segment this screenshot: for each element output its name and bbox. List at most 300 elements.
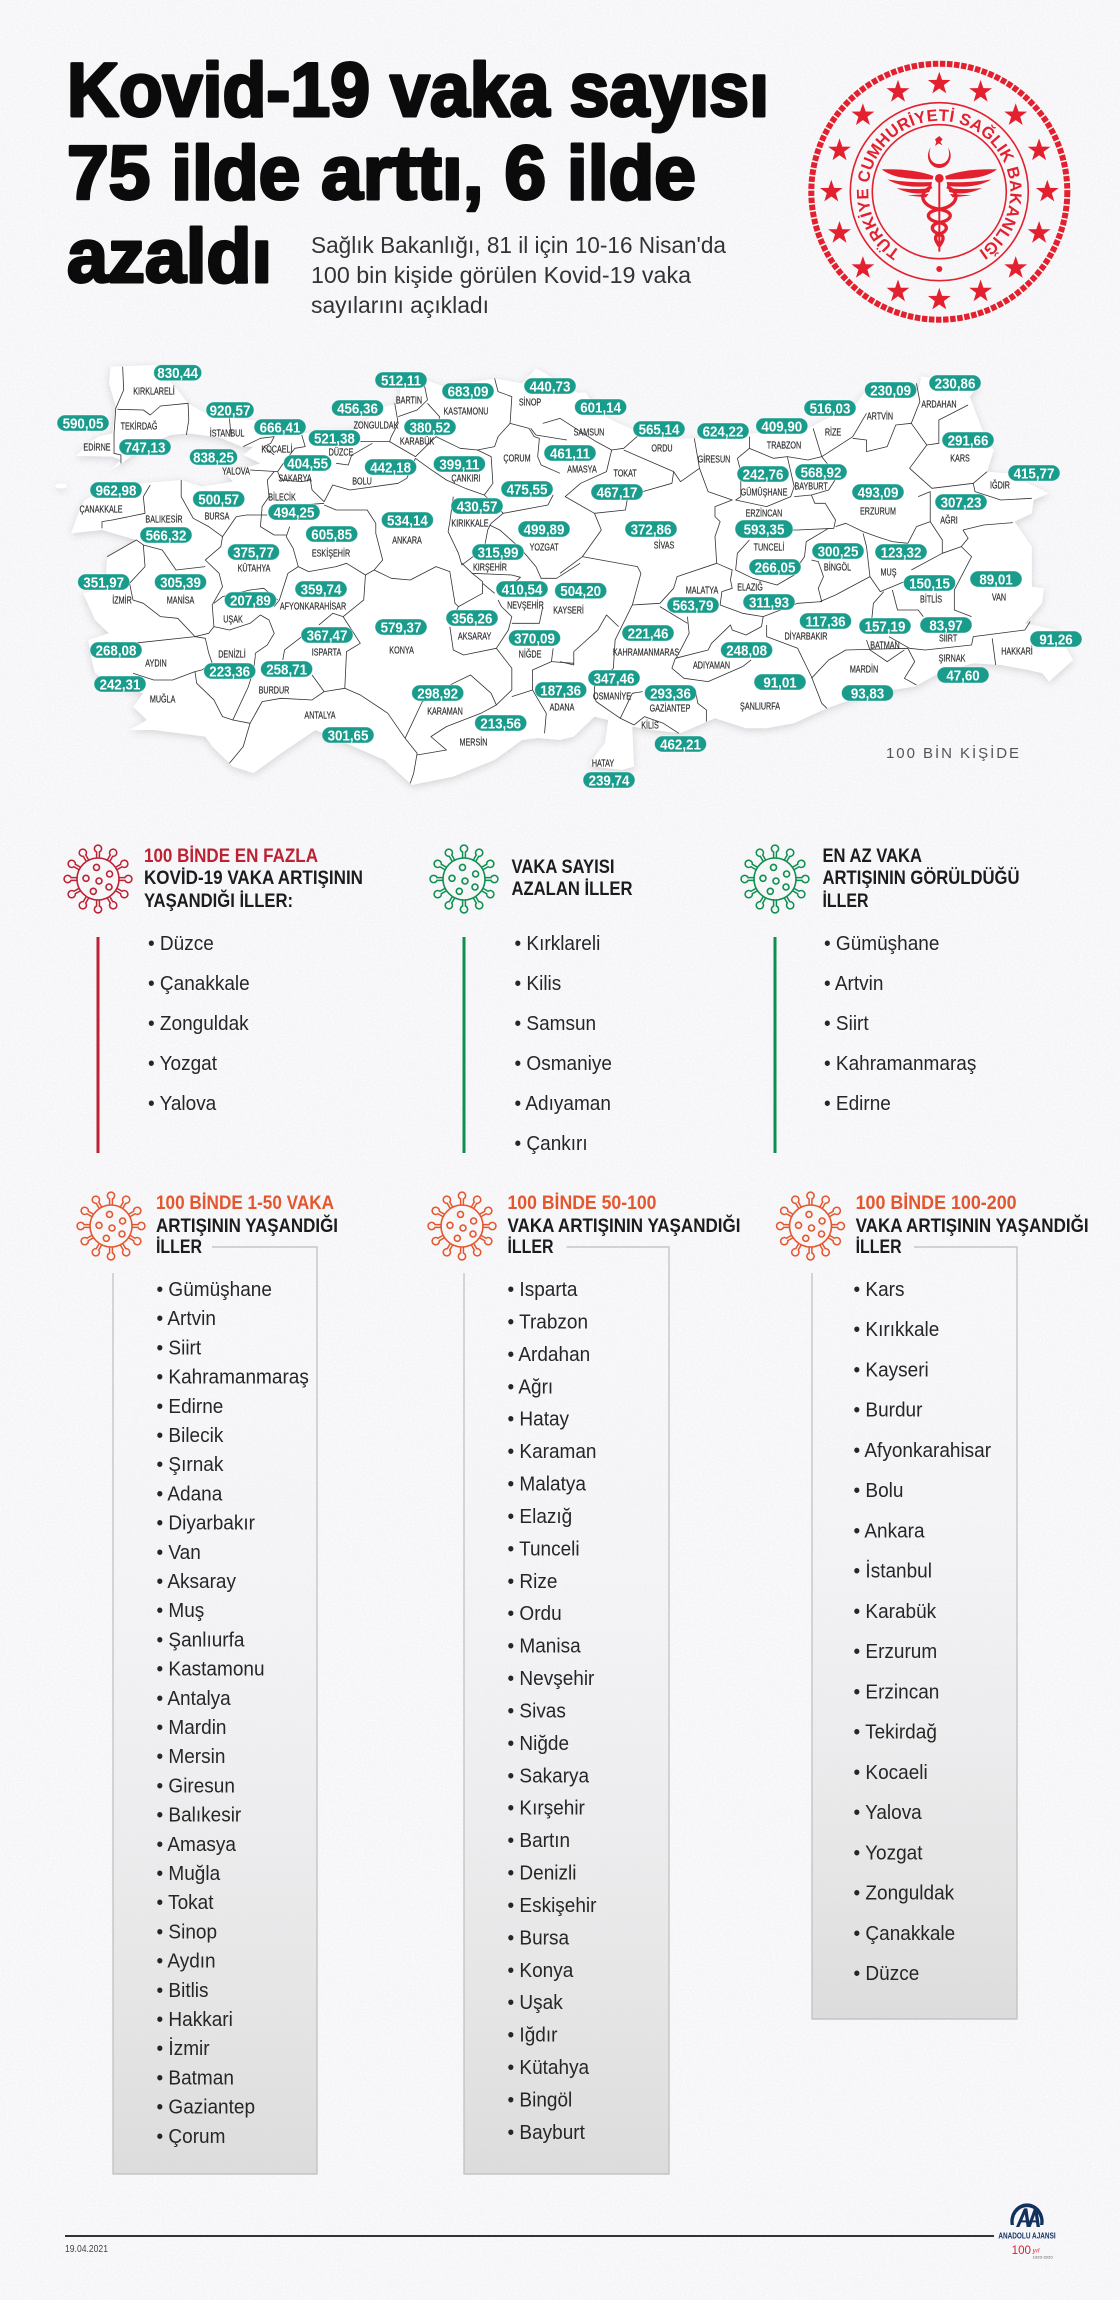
badge 311,93: 311,93 [749,595,789,612]
badge 89,01 [970,571,1022,589]
list: 100-200 provinces: • Kars [854,1279,905,1301]
subtitle text block: 100 bin kişide görülen Kovid-19 vaka [311,262,691,288]
list: 50-100 provinces: • Bursa [508,1927,569,1950]
heading: decreasing provinces: VAKA SAYISI [512,857,614,878]
badge 47,60: 47,60 [946,668,980,685]
badge 213,56: 213,56 [480,716,521,733]
badge 462,21: 462,21 [660,737,701,754]
province name labels: KIRKLARELİ [133,385,175,397]
province name labels [79,385,1033,769]
badge 307,23: 307,23 [941,495,982,512]
badge 430,57: 430,57 [457,499,498,516]
list: 100-200 provinces: • Düzce [854,1963,919,1985]
badge 601,14: 601,14 [580,400,621,417]
badge 409,90: 409,90 [761,419,802,436]
panel: 1-50 per 100k [77,1192,338,2174]
badge 356,26: 356,26 [452,611,493,628]
badge 221,46: 221,46 [628,626,669,643]
province name labels: IĞDIR [990,479,1010,491]
province name labels: MARDİN [850,663,878,675]
province name labels: BATMAN [870,639,900,651]
list: 100-200 provinces: • Ankara [854,1520,925,1543]
logo: Anadolu Ajansı: ANADOLU AJANSI [998,2230,1056,2240]
badge 315,99: 315,99 [478,545,519,562]
province name labels: KIRIKKALE [451,517,489,529]
list: 1-50 provinces: • Balıkesir [156,1804,242,1827]
panel: 50-100 per 100k [428,1192,740,2174]
subtitle text block [311,232,726,318]
heading: lowest increase: EN AZ VAKA [822,846,922,867]
list: 50-100 provinces: • Karaman [508,1441,597,1463]
list: highest increase provinces: • Düzce [148,933,214,955]
list: 1-50 provinces: • Mardin [156,1717,226,1739]
heading: 50-100: 100 BİNDE 50-100 [508,1193,656,1214]
province name labels: SİNOP [519,396,541,408]
province name labels: KARS [950,452,970,464]
list: 50-100 provinces: • Eskişehir [508,1895,597,1917]
badge 91,26: 91,26 [1039,632,1073,649]
province name labels: KOCAELİ [261,443,293,455]
badge 442,18: 442,18 [370,460,411,477]
province name labels: HAKKARİ [1001,645,1033,657]
panel: 100-200 per 100k [777,1192,1089,2019]
badge 239,74: 239,74 [589,773,630,790]
icon: orange virus [428,1192,496,1260]
footer rule [65,2235,994,2237]
province name labels: TRABZON [767,439,801,451]
title: Kovid-19 vaka sayısı [67,48,769,133]
list: 50-100 provinces: • Bingöl [508,2089,572,2112]
list: 1-50 provinces: • Bitlis [156,1979,209,2002]
province name labels: ERZURUM [860,505,896,517]
badge 291,66: 291,66 [948,433,989,450]
list: 50-100 provinces: • Niğde [508,1732,569,1755]
list: 50-100 provinces: • Malatya [508,1473,586,1496]
badge 123,32: 123,32 [881,545,922,562]
list: 50-100 provinces: • Sivas [508,1700,566,1723]
province name labels: ISPARTA [312,646,341,658]
list: 100-200 provinces: • Yozgat [854,1842,923,1864]
badge 91,01: 91,01 [763,675,797,692]
list: 100-200 provinces: • İstanbul [854,1559,932,1583]
province name labels: ÇANAKKALE [79,503,123,515]
list: 50-100 provinces: • Nevşehir [508,1668,595,1690]
province name labels: ŞIRNAK [939,652,966,664]
badge 516,03: 516,03 [810,401,851,418]
list: 1-50 provinces: • Amasya [156,1833,236,1856]
logo: Anadolu Ajansı: 1920-2020 [1033,2255,1053,2260]
province name labels: AYDIN [145,657,167,669]
list: lowest increase provinces [824,933,977,1115]
list: 50-100 provinces: • Ağrı [508,1376,553,1398]
badge 830,44: 830,44 [157,365,198,382]
list: 50-100 provinces: • Tunceli [508,1538,580,1561]
province name labels: MALATYA [686,584,718,596]
badge 157,19: 157,19 [865,619,906,636]
province name labels: TOKAT [613,467,637,479]
province name labels: ŞANLIURFA [740,700,780,712]
province name labels: KİLİS [641,719,659,731]
title: azaldı [67,214,272,299]
list: 50-100 provinces: • Hatay [508,1408,569,1431]
province name labels: ADANA [550,701,575,713]
province name labels: ARTVİN [867,410,893,422]
list: decreasing provinces: • Adıyaman [514,1093,611,1115]
list: 50-100 provinces: • Denizli [508,1862,576,1885]
province name labels: KÜTAHYA [238,562,271,574]
province name labels: SİİRT [939,632,958,644]
list: 50-100 provinces: • Kırşehir [508,1797,585,1820]
box background [113,1247,317,2174]
province name labels: KARABÜK [400,435,434,447]
heading: highest increase [144,846,363,912]
list: 1-50 provinces: • Muş [156,1600,205,1622]
province name labels: DİYARBAKIR [784,630,828,642]
province name labels: ERZİNCAN [746,507,782,519]
heading: decreasing provinces: AZALAN İLLER [512,879,633,900]
province borders east [543,383,1032,733]
list: 1-50 provinces: • Edirne [156,1395,223,1418]
badge 461,11: 461,11 [550,446,590,463]
list: 1-50 provinces: • Kahramanmaraş [156,1366,309,1389]
list: decreasing provinces: • Osmaniye [514,1053,612,1075]
badge 230,86: 230,86 [935,376,976,393]
badge 456,36: 456,36 [337,401,378,418]
province borders west [102,367,580,783]
list: 1-50 provinces: • Şanlıurfa [156,1629,245,1652]
badge 83,97: 83,97 [929,618,963,635]
badge 590,05: 590,05 [63,416,104,433]
list: 1-50 provinces: • Çorum [156,2125,225,2148]
logo: Anadolu Ajansı: yıl [1032,2247,1040,2254]
province name labels: ADIYAMAN [693,659,730,671]
icon: orange virus [777,1192,844,1260]
province name labels: ANKARA [392,534,422,546]
province name labels: NİĞDE [519,648,542,660]
badge 305,39: 305,39 [160,575,201,592]
heading: 100-200: 100 BİNDE 100-200 [856,1193,1017,1214]
list: highest increase provinces: • Çanakkale [148,973,250,995]
province name labels: KARAMAN [427,705,463,717]
list: 50-100 provinces: • Uşak [508,1992,563,2014]
province name labels: RİZE [825,426,841,438]
badge 399,11: 399,11 [439,457,480,474]
badge 89,01: 89,01 [979,572,1013,589]
province name labels: NEVŞEHİR [507,599,544,611]
badge 351,97: 351,97 [83,575,124,592]
list: 1-50 provinces: • Diyarbakır [156,1512,255,1535]
badge 521,38: 521,38 [314,431,355,448]
list: lowest increase provinces: • Kahramanmaraş [824,1053,977,1075]
province name labels: VAN [992,591,1006,603]
heading: lowest increase [822,846,1020,912]
province name labels: MUĞLA [150,693,176,705]
map silhouette [55,365,1073,785]
list: 1-50 provinces: • Aydın [156,1950,216,1973]
province name labels: İZMİR [112,594,132,606]
province name labels: MERSİN [460,736,487,748]
list: 100-200 provinces: • Kayseri [854,1359,929,1382]
subtitle text block: sayılarını açıkladı [311,292,489,318]
list: highest increase provinces: • Zonguldak [148,1013,249,1035]
province name labels: ELAZIĞ [737,581,763,593]
badge 248,08: 248,08 [726,643,767,660]
list: decreasing provinces: • Kırklareli [514,933,600,955]
badge 493,09: 493,09 [858,485,899,502]
badge 117,36: 117,36 [805,614,846,631]
province name labels: GÜMÜŞHANE [741,486,788,498]
list: 100-200 provinces: • Burdur [854,1399,923,1422]
panel: decreasing provinces [430,845,633,1155]
province name labels: ANTALYA [304,709,336,721]
badge 475,55: 475,55 [507,482,548,499]
list: 1-50 provinces: • Batman [156,2067,234,2090]
list: 50-100 provinces: • Kütahya [508,2057,589,2079]
list: 1-50 provinces: • Antalya [156,1687,231,1710]
province name labels: MUŞ [881,566,897,578]
list: 1-50 provinces: • Tokat [156,1892,214,1914]
list: 50-100 provinces: • Sakarya [508,1765,589,1787]
badge 47,60 [937,667,989,685]
list: 100-200 provinces: • Tekirdağ [854,1721,937,1744]
list: 100-200 provinces: • Erzurum [854,1641,937,1663]
province name labels: SAMSUN [574,426,604,438]
province name labels: ZONGULDAK [354,419,399,431]
province name labels: KAYSERİ [553,604,584,616]
list: lowest increase provinces: • Siirt [824,1013,869,1035]
badge 404,55: 404,55 [287,456,328,473]
list: highest increase provinces: • Yozgat [148,1053,218,1075]
list: 1-50 provinces: • Mersin [156,1746,225,1768]
list: highest increase provinces: • Yalova [148,1093,216,1115]
province name labels: OSMANİYE [593,690,631,702]
province name labels: EDİRNE [83,441,111,453]
list: 50-100 provinces: • Isparta [508,1279,578,1301]
list: 100-200 provinces: • Karabük [854,1600,936,1623]
list: 1-50 provinces [156,1279,309,2148]
province name labels: GAZİANTEP [650,702,691,714]
list: 100-200 provinces: • Afyonkarahisar [854,1439,992,1462]
icon: Ministry of Health seal [808,60,1070,323]
badge 838,25: 838,25 [193,450,234,467]
badge 372,86: 372,86 [631,522,672,539]
badge 230,09: 230,09 [870,383,911,400]
list: 1-50 provinces: • Muğla [156,1863,220,1885]
province name labels: SİVAS [654,539,675,551]
badge 207,89: 207,89 [230,593,271,610]
list: 50-100 provinces: • Konya [508,1959,573,1982]
list: 1-50 provinces: • Bilecik [156,1425,224,1447]
box background [812,1247,1017,2019]
badge 566,32: 566,32 [146,528,187,545]
badge 962,98: 962,98 [96,483,137,500]
province name labels: ÇANKIRI [451,472,481,484]
list: 50-100 provinces: • Iğdır [508,2024,558,2047]
badge 512,11: 512,11 [381,373,421,390]
badge 593,35 [735,520,793,539]
badge 380,52: 380,52 [410,420,451,437]
icon: orange virus [77,1192,145,1260]
heading: 50-100 [508,1193,740,1258]
heading: 100-200: İLLER [856,1237,902,1258]
panel: highest increase [64,845,363,1153]
heading: highest increase: YAŞANDIĞI İLLER: [144,890,293,912]
subtitle text block: Sağlık Bakanlığı, 81 il için 10-16 Nisan'da [311,232,726,258]
icon: green virus [430,845,498,913]
badge 266,05: 266,05 [755,560,796,577]
province name labels: MANİSA [167,594,194,606]
box background [464,1247,669,2174]
province name labels: HATAY [592,757,614,769]
badge 467,17: 467,17 [597,485,638,502]
list: 50-100 provinces: • Ardahan [508,1343,590,1366]
heading: lowest increase: İLLER [822,891,869,912]
badge 579,37: 579,37 [381,620,422,637]
logo: Anadolu Ajansı: 100 [1012,2243,1031,2257]
title: 75 ilde arttı, 6 ilde [67,131,696,216]
heading: 50-100: VAKA ARTIŞININ YAŞANDIĞI [508,1215,740,1237]
badge 300,25: 300,25 [818,544,859,561]
list: 100-200 provinces: • Kocaeli [854,1761,928,1784]
badge 920,57: 920,57 [210,403,251,420]
list: decreasing provinces: • Çankırı [514,1133,588,1155]
badge 242,76: 242,76 [743,467,784,484]
title [67,48,769,299]
list: 1-50 provinces: • İzmir [156,2037,210,2060]
list: 1-50 provinces: • Hakkari [156,2009,233,2031]
list: 1-50 provinces: • Sinop [156,1921,217,1944]
badge 91,01 [754,674,806,692]
heading: 1-50: 100 BİNDE 1-50 VAKA [156,1193,334,1214]
badge 347,46: 347,46 [594,671,635,688]
list: 50-100 provinces: • Ordu [508,1603,562,1625]
province name labels: DENİZLİ [218,648,246,660]
province name labels: ARDAHAN [921,398,957,410]
list: lowest increase provinces: • Gümüşhane [824,933,939,955]
badge 293,36: 293,36 [650,686,691,703]
badge 187,36: 187,36 [540,683,581,700]
province name labels: UŞAK [223,613,243,625]
badge 534,14: 534,14 [387,513,428,530]
badge 298,92: 298,92 [417,686,458,703]
province name labels: YALOVA [222,465,250,477]
badge 415,77: 415,77 [1014,466,1055,483]
logo: Anadolu Ajansı [998,2203,1056,2260]
badge 593,35: 593,35 [744,522,785,539]
list: 1-50 provinces: • Şırnak [156,1454,224,1476]
badge 747,13: 747,13 [125,440,166,457]
list: 50-100 provinces [508,1279,597,2144]
badge 242,31: 242,31 [100,677,141,694]
badge 93,83 [842,685,894,703]
list: 100-200 provinces: • Bolu [854,1480,903,1502]
badge 494,25: 494,25 [274,505,315,522]
province name labels: TEKİRDAĞ [121,420,158,432]
province name labels: AFYONKARAHİSAR [280,600,346,612]
badge 150,15: 150,15 [909,576,950,593]
list: 1-50 provinces: • Van [156,1541,201,1564]
list: 1-50 provinces: • Aksaray [156,1571,236,1593]
badge 223,36: 223,36 [209,664,250,681]
heading: 1-50: ARTIŞININ YAŞANDIĞI [156,1215,338,1237]
badge 440,73: 440,73 [530,379,571,396]
heading: 1-50: İLLER [156,1237,202,1258]
province name labels: AKSARAY [458,630,492,642]
list: decreasing provinces: • Kilis [514,973,561,995]
badge 683,09: 683,09 [448,384,489,401]
map unit note: 100 BİN KİŞİDE [886,744,1019,762]
province name labels: KIRŞEHİR [473,561,507,573]
list: 50-100 provinces: • Bayburt [508,2121,585,2144]
list: 1-50 provinces: • Gaziantep [156,2096,255,2119]
list: decreasing provinces: • Samsun [514,1013,596,1035]
value badges [57,365,1082,790]
province name labels: BİTLİS [920,593,942,605]
list: 50-100 provinces: • Manisa [508,1635,581,1658]
province name labels: ÇORUM [503,452,531,464]
list: 100-200 provinces: • Zonguldak [854,1882,954,1905]
province name labels: BİNGÖL [824,561,851,573]
list: lowest increase provinces: • Edirne [824,1093,891,1115]
badge 563,79: 563,79 [673,598,714,615]
badge 605,85: 605,85 [311,527,352,544]
heading: highest increase: 100 BİNDE EN FAZLA [144,846,318,867]
badge 666,41: 666,41 [260,420,301,437]
province name labels: KASTAMONU [443,405,489,417]
heading: 50-100: İLLER [508,1237,554,1258]
badge 268,08: 268,08 [96,643,137,660]
panel: lowest increase [741,845,1020,1153]
date: 19.04.2021 [65,2243,108,2255]
list: 100-200 provinces: • Yalova [854,1802,922,1824]
province name labels: BALIKESİR [145,513,183,525]
badge 93,83: 93,83 [851,686,884,703]
province name labels: BURSA [205,510,230,522]
badge 258,71: 258,71 [266,662,307,679]
province name labels: KAHRAMANMARAŞ [613,646,679,658]
badge 301,65: 301,65 [328,728,369,745]
heading: 100-200: VAKA ARTIŞININ YAŞANDIĞI [856,1215,1089,1237]
list: 100-200 provinces: • Kırıkkale [854,1319,939,1341]
map of Turkey with provinces [55,365,1082,790]
province name labels: AMASYA [567,463,597,475]
badge 370,09: 370,09 [514,631,555,648]
list: 50-100 provinces: • Trabzon [508,1311,588,1334]
badge 624,22: 624,22 [703,424,744,441]
province name labels: BAYBURT [794,480,828,492]
list: 100-200 provinces [854,1279,992,1985]
list: lowest increase provinces: • Artvin [824,973,883,995]
province name labels: BİLECİK [268,491,296,503]
icon: Ministry of Health seal: TÜRKİYE CUMHURİYETİ SAĞLIK BAKANLIĞI [856,108,1022,260]
badge 565,14: 565,14 [639,422,680,439]
province name labels: ESKİŞEHİR [312,547,350,559]
list: decreasing provinces [514,933,612,1155]
province name labels: ORDU [651,442,673,454]
icon: green virus [741,845,809,913]
list: 1-50 provinces: • Artvin [156,1308,216,1330]
heading: 100-200 [856,1193,1089,1258]
badge 83,97 [920,617,972,635]
list: 100-200 provinces: • Erzincan [854,1681,939,1704]
province name labels: SAKARYA [278,472,312,484]
province name labels: İSTANBUL [210,427,244,439]
list: 50-100 provinces: • Rize [508,1570,557,1593]
list: 1-50 provinces: • Giresun [156,1775,235,1798]
list: 50-100 provinces: • Elazığ [508,1505,572,1528]
badge 367,47: 367,47 [307,628,348,645]
badge 499,89: 499,89 [524,522,565,539]
